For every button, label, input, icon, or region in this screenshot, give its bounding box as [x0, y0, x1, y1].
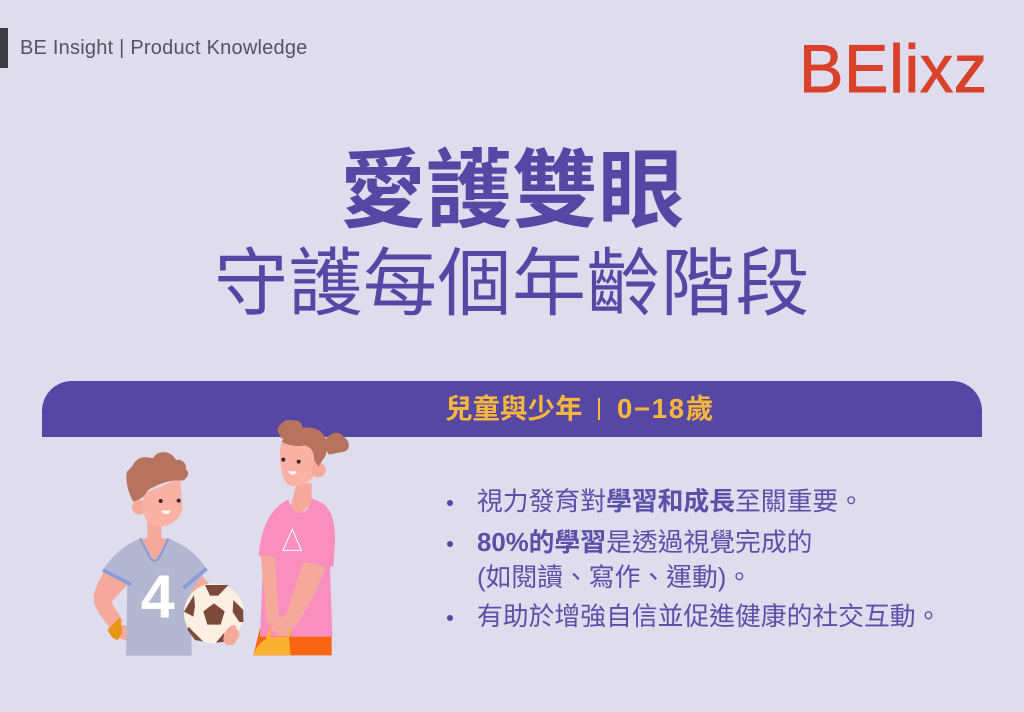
heading separator — [598, 398, 600, 420]
bullet 1: 視力發育對學習和成長至關重要。 — [477, 488, 864, 516]
bullet 2 — [447, 529, 812, 592]
bullet list — [447, 488, 941, 631]
bullet 2: 80%的學習是透過視覺完成的 — [477, 529, 812, 557]
section heading: 兒童與少年 — [445, 393, 582, 424]
section band — [42, 381, 982, 437]
header label: BE Insight | Product Knowledge — [20, 37, 308, 59]
illustration: two children — [94, 420, 349, 656]
logo: BElixz: BElixz — [799, 31, 988, 107]
title line 2: 守護每個年齡階段 — [214, 224, 810, 331]
girl — [253, 420, 349, 655]
title line 1: 愛護雙眼 — [340, 120, 684, 245]
boy: 4 — [141, 562, 175, 630]
header tag bar — [0, 28, 8, 68]
bullet 3: 有助於增強自信並促進健康的社交互動。 — [477, 603, 941, 631]
boy — [94, 452, 208, 656]
soccer ball — [184, 583, 244, 645]
age range: 0−18歲 — [617, 393, 713, 424]
section heading — [445, 393, 713, 424]
bullet 2: (如閱讀、寫作、運動)。 — [477, 564, 752, 592]
